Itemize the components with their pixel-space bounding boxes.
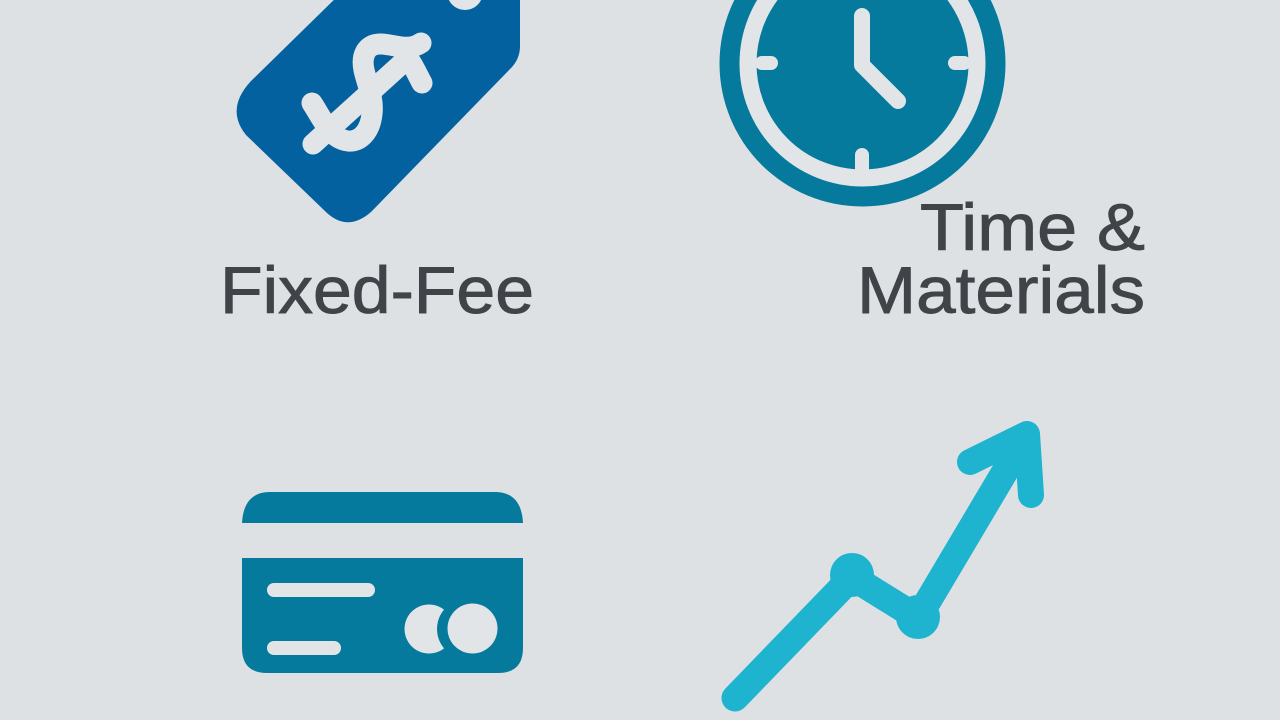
label: Time & Materials: Materials [857,253,1145,327]
label: Time & Materials: Time & [920,190,1145,264]
icon: credit card [242,492,523,673]
icon: clock [720,0,1006,206]
label: Fixed-Fee: Fixed-Fee [220,253,534,327]
icon: rising arrow line [735,434,1031,698]
icon: price tag with dollar sign [237,0,520,222]
label: Time & Materials [857,190,1145,327]
